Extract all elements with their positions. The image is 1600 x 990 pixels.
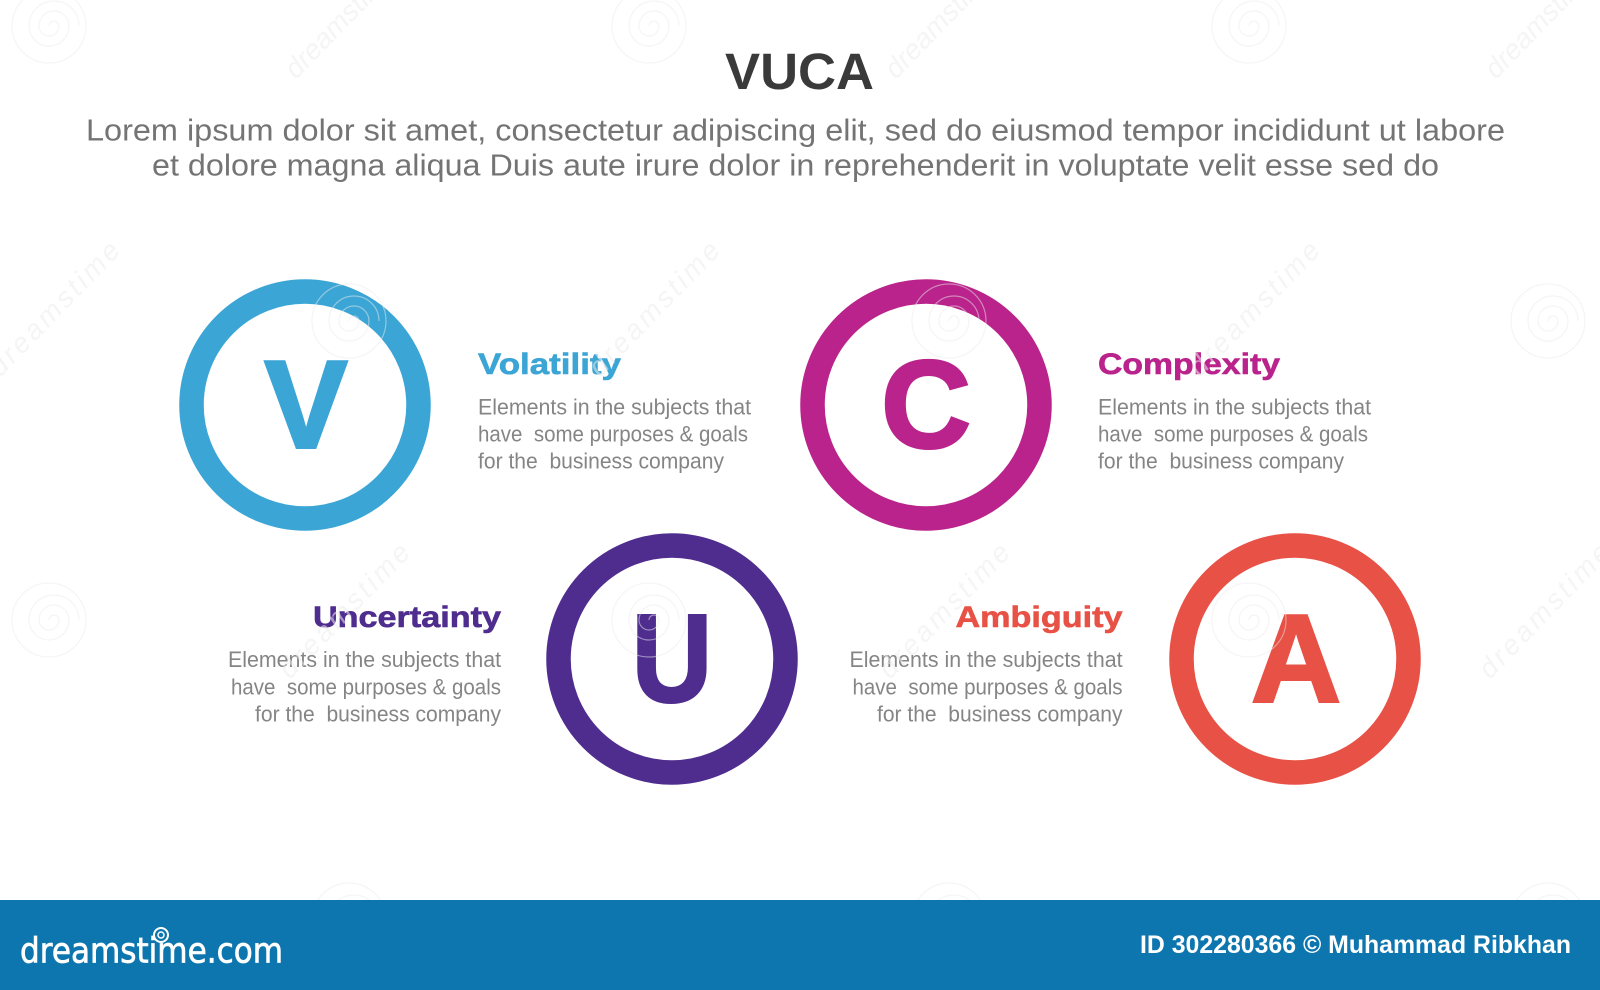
text block: complexity description [1098, 394, 1371, 474]
text block: complexity description: have some purposes & goals [1098, 422, 1368, 446]
watermark pattern: dreamstime [582, 235, 726, 382]
footer banner [0, 900, 1600, 990]
icon: C ring [812, 292, 1040, 518]
watermark pattern: dreamstime [1182, 235, 1326, 382]
text block: volatility description: for the business company [478, 448, 724, 474]
icon: V ring: V [265, 336, 347, 474]
subtitle text: Lorem ipsum dolor sit amet, consectetur adipiscing elit, sed do eiusmod tempor incididunt ut labore [86, 112, 1505, 148]
icon: A ring [1182, 546, 1408, 772]
icon: U ring [558, 546, 786, 772]
text block: ambiguity description [850, 647, 1122, 726]
text block: uncertainty description: Elements in the subjects that [228, 647, 501, 672]
panel: ambiguity [850, 546, 1408, 772]
watermark pattern: dreamstime [872, 537, 1016, 684]
text block: ambiguity description: have some purposes & goals [852, 674, 1122, 700]
panel: volatility [192, 292, 751, 518]
heading: Uncertainty: Uncertainty [313, 601, 501, 634]
text block: volatility description [478, 394, 751, 474]
text block: ambiguity description: for the business company [877, 702, 1122, 726]
subtitle text [86, 112, 1505, 182]
text block: complexity description: for the business company [1098, 448, 1344, 474]
text block: volatility description: Elements in the subjects that [478, 394, 751, 420]
text block: uncertainty description: have some purposes & goals [231, 674, 501, 700]
heading: Ambiguity: Ambiguity [956, 601, 1123, 634]
icon: V ring [192, 292, 418, 518]
text block: volatility description: have some purposes & goals [478, 422, 748, 446]
watermark pattern: dreamstime [272, 537, 416, 684]
text block: ambiguity description: Elements in the subjects that [850, 647, 1122, 672]
text block: complexity description: Elements in the subjects that [1098, 394, 1371, 420]
heading: Complexity: Complexity [1098, 348, 1280, 381]
icon: U ring: U [632, 590, 712, 728]
panel: complexity [812, 292, 1371, 518]
icon: A ring: A [1251, 590, 1341, 728]
panel: uncertainty [228, 546, 786, 772]
title: VUCA [725, 43, 874, 100]
footer credit: ID 302280366 © Muhammad Ribkhan [1140, 931, 1571, 959]
text block: uncertainty description: for the business company [255, 702, 501, 726]
footer logo: dreamstime.com: dreamstime.com [20, 932, 283, 972]
icon: C ring: C [881, 336, 971, 474]
heading: Volatility: Volatility [478, 348, 621, 381]
subtitle text: et dolore magna aliqua Duis aute irure dolor in reprehenderit in voluptate velit esse sed do [152, 148, 1439, 182]
text block: uncertainty description [228, 647, 501, 726]
